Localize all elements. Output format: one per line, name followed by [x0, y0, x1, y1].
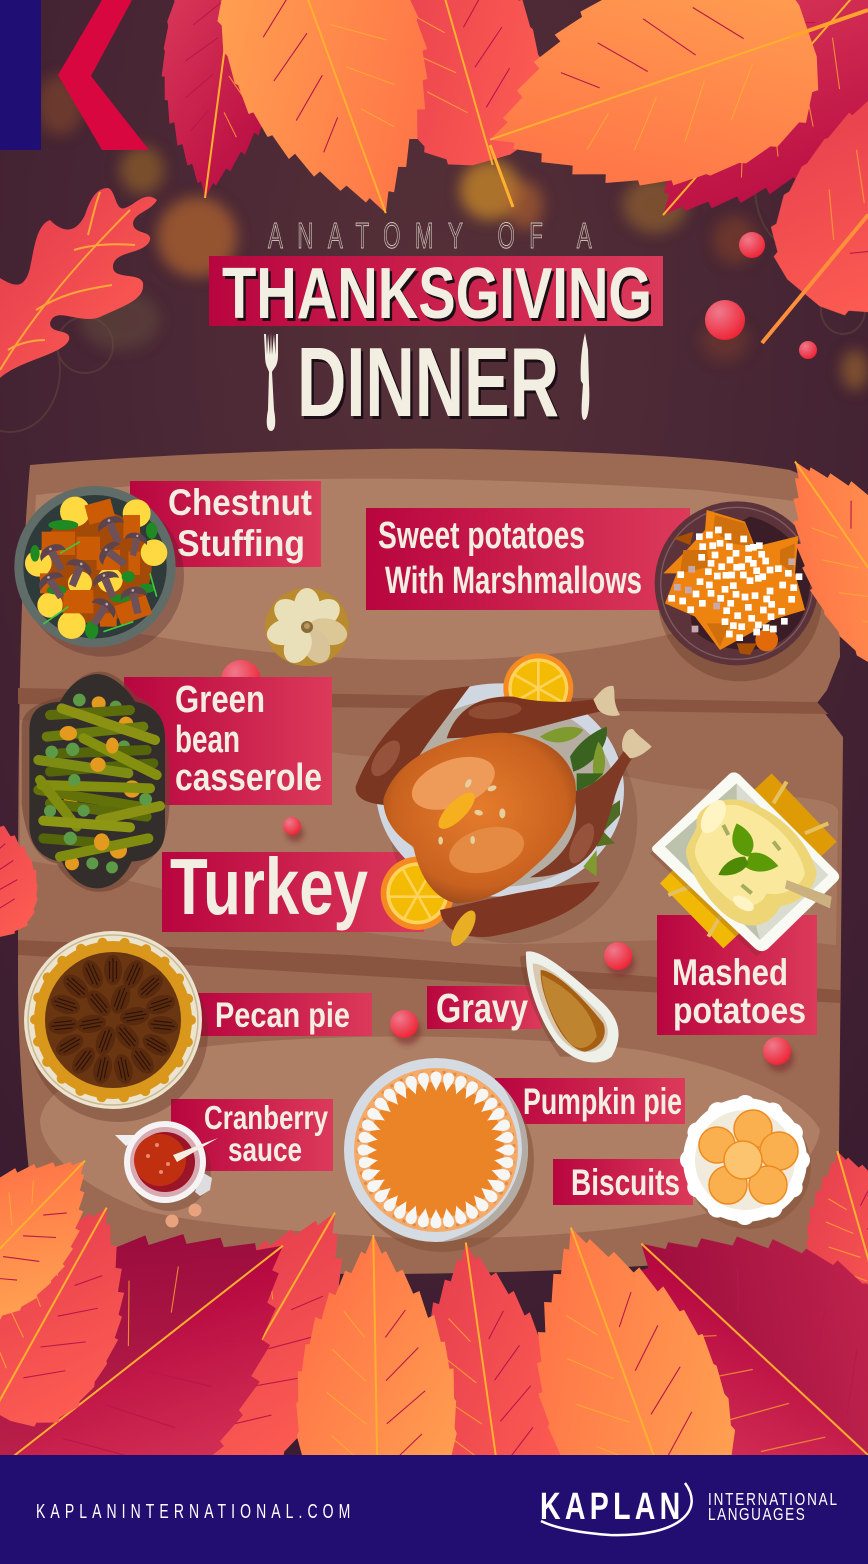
logo arc	[541, 1483, 692, 1535]
logo descriptor: INTERNATIONAL	[708, 1490, 837, 1510]
dish: biscuits	[683, 1098, 811, 1229]
website: KAPLANINTERNATIONAL.COM	[36, 1499, 350, 1523]
leaf: top crimson left	[145, 0, 297, 206]
dish: pumpkin pie	[344, 1058, 534, 1252]
label: turkey: Turkey	[170, 842, 368, 931]
leaf: bottom crimson right	[556, 1152, 868, 1563]
logo chevron	[58, 0, 149, 150]
berry: below mashed label	[763, 1037, 791, 1065]
dish: mashed potatoes	[650, 772, 839, 957]
upper bone	[593, 686, 620, 716]
label: sweet potatoes with marshmallows	[366, 508, 690, 610]
title: dinner: DINNER	[297, 327, 559, 437]
leaf: bottom left orange	[0, 1119, 129, 1342]
dish: sweet potatoes with marshmallows	[655, 501, 822, 681]
berry: above gravy right	[604, 942, 632, 970]
upper drumstick	[447, 697, 600, 738]
wood patch: top	[30, 479, 830, 660]
leaf: right table orange	[744, 426, 868, 701]
label: sweet potatoes with marshmallows: Sweet potatoes	[378, 515, 585, 557]
leaf: top crimson right	[595, 0, 868, 274]
kaplan wordmark: KAPLAN	[540, 1486, 680, 1528]
dish: pecan pie	[24, 931, 208, 1122]
garnish greens	[540, 727, 620, 877]
dish: chestnut stuffing	[14, 486, 184, 657]
leaf: oak left	[0, 188, 157, 378]
leaf: bottom crimson left	[0, 1147, 360, 1564]
dish: turkey	[356, 653, 652, 950]
breast	[383, 733, 576, 903]
label: pumpkin pie	[495, 1078, 685, 1124]
berry: behind bean label	[221, 660, 261, 700]
left wing	[356, 686, 470, 805]
logo descriptor line two: LANGUAGES	[708, 1505, 805, 1525]
leaf: large orange right	[456, 0, 848, 239]
icon: fork	[264, 333, 278, 431]
label: cranberry sauce: sauce	[228, 1131, 302, 1168]
label: pumpkin pie: Pumpkin pie	[523, 1081, 682, 1122]
pumpkin decoration	[264, 588, 350, 668]
title: anatomy of a: ANATOMY OF A	[268, 217, 592, 256]
right drumstick	[530, 752, 633, 877]
leaf: bottom center orange	[293, 1234, 458, 1528]
label: chestnut stuffing: Stuffing	[177, 523, 305, 564]
label: chestnut stuffing	[130, 481, 321, 567]
table	[18, 449, 843, 1274]
label: mashed potatoes: potatoes	[673, 990, 806, 1031]
berry: small right	[799, 341, 817, 359]
label: cranberry sauce: Cranberry	[204, 1099, 329, 1136]
title banner: thanksgiving: THANKSGIVING	[222, 254, 652, 334]
logo block	[0, 0, 41, 150]
label: cranberry sauce	[171, 1099, 333, 1171]
leaf: bottom right orange	[487, 1197, 762, 1552]
label: chestnut stuffing: Chestnut	[168, 482, 312, 523]
dish: green bean casserole	[22, 672, 170, 892]
label: green bean casserole: casserole	[175, 757, 322, 799]
stem: red right edge	[762, 215, 868, 343]
label: sweet potatoes with marshmallows: With Marshmallows	[385, 560, 642, 602]
berry: near pecan label	[390, 1010, 418, 1038]
dish: gravy boat	[520, 951, 619, 1062]
berry: below bean label	[283, 817, 301, 835]
leaf: bottom left red	[0, 1171, 173, 1452]
bokeh rings	[0, 125, 865, 432]
bokeh lights	[36, 75, 868, 390]
dish: cranberry sauce	[115, 1121, 218, 1228]
lower wing	[440, 882, 600, 937]
footer	[0, 1455, 868, 1564]
label: mashed potatoes	[657, 915, 817, 1035]
plank gap: lower	[18, 940, 840, 1003]
icon: knife	[581, 333, 589, 420]
label: gravy: Gravy	[436, 985, 528, 1031]
wood patch: bottom	[40, 1036, 820, 1238]
label: mashed potatoes: Mashed	[672, 952, 788, 993]
leaf: left small red	[0, 810, 38, 940]
label: green bean casserole: bean	[175, 719, 240, 761]
leaf: red right edge	[737, 0, 868, 350]
berry: red right middle	[705, 300, 745, 340]
label: green bean casserole	[124, 677, 332, 805]
napkin	[660, 773, 837, 948]
label: green bean casserole: Green	[175, 679, 265, 721]
orange slice top	[503, 653, 573, 723]
leaf: bottom red behind	[113, 1172, 406, 1515]
berry: red right top	[739, 232, 765, 258]
wood patch: middle	[20, 720, 838, 945]
leaf: right lower red	[783, 1135, 868, 1328]
plank gap: upper	[18, 688, 828, 714]
orange slice bottom	[381, 857, 454, 930]
leaf: bottom center crimson	[394, 1232, 576, 1531]
leaf: top red center	[342, 0, 566, 186]
right bone	[622, 729, 652, 758]
label: pecan pie: Pecan pie	[215, 996, 350, 1035]
stem: large orange	[790, 10, 868, 37]
leaf: top orange center	[191, 0, 477, 246]
stem: red center	[490, 145, 513, 207]
label: biscuits: Biscuits	[571, 1162, 680, 1203]
label: biscuits	[553, 1159, 693, 1205]
